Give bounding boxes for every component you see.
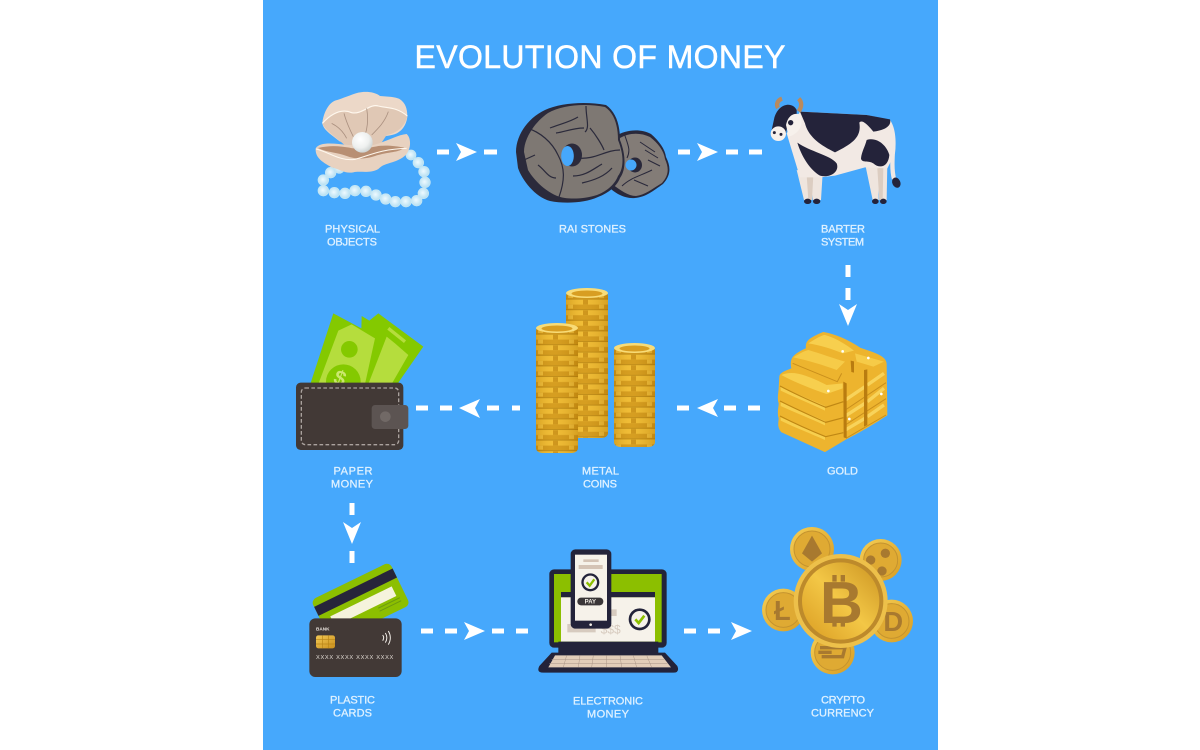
label: rai stones: RAI STONES	[559, 224, 626, 236]
dash coin	[811, 630, 855, 674]
label: metal coins	[582, 466, 619, 490]
label: metal coins: COINS	[583, 478, 617, 490]
label: plastic cards: CARDS	[333, 708, 372, 720]
legs	[797, 163, 887, 200]
arrow: barter to gold	[839, 265, 857, 326]
icon: wallet with banknotes: $	[331, 366, 350, 391]
ethereum coin	[790, 527, 834, 571]
pearl necklace	[318, 150, 430, 207]
arrow: cards to electronic money	[421, 622, 528, 640]
rear patch	[861, 139, 889, 166]
upper shell	[322, 92, 407, 142]
contactless symbol	[383, 631, 390, 645]
front stack	[536, 323, 578, 453]
label: crypto currency	[811, 694, 875, 720]
phone	[571, 549, 611, 629]
label: electronic money: MONEY	[587, 708, 630, 720]
arrow: gold to coins	[677, 399, 760, 417]
label: plastic cards: PLASTIC	[330, 694, 375, 706]
label: barter system	[821, 224, 865, 248]
screen check mark	[629, 608, 651, 630]
label: paper money: PAPER	[334, 466, 373, 478]
icon: gold bars	[778, 333, 887, 451]
sparkles	[827, 350, 883, 420]
label: crypto currency: CRYPTO	[821, 694, 865, 706]
wallet body	[296, 383, 403, 450]
label: paper money: MONEY	[331, 478, 374, 490]
label: paper money	[331, 466, 374, 490]
left stack highlights	[781, 373, 843, 394]
label: barter system: BARTER	[821, 224, 865, 236]
muzzle	[771, 126, 786, 141]
laptop base	[538, 642, 678, 673]
wallet stitching	[301, 388, 399, 445]
laptop screen frame	[549, 569, 667, 648]
icon: rai stones	[516, 103, 669, 203]
icon: pearl oyster and necklace	[316, 92, 430, 207]
pay button	[577, 598, 603, 605]
lower shell	[316, 134, 410, 173]
right stack	[614, 343, 655, 447]
label: physical objects: OBJECTS	[327, 236, 377, 248]
icon: wallet with banknotes	[296, 313, 423, 450]
small rai stone	[608, 130, 669, 198]
bitcoin coin	[794, 554, 888, 648]
label: physical objects: PHYSICAL	[325, 224, 380, 236]
green card	[311, 562, 410, 643]
label: crypto currency: CURRENCY	[811, 708, 875, 720]
label: metal coins: METAL	[582, 466, 619, 478]
phone check mark	[581, 573, 599, 591]
label: electronic money: ELECTRONIC	[573, 696, 643, 708]
arrow: paper money to plastic cards	[343, 503, 361, 563]
screen amount: $$$	[601, 622, 621, 636]
label: physical objects	[325, 224, 380, 248]
icon: coin stacks	[536, 288, 655, 453]
ripple coin	[860, 539, 902, 581]
dogecoin coin	[870, 600, 913, 642]
screen placeholder lines	[567, 609, 617, 632]
wallet clasp	[372, 405, 408, 429]
litecoin coin: Ł	[774, 595, 791, 626]
pearl	[352, 132, 373, 153]
blue poster panel	[263, 0, 938, 750]
dark front card	[309, 618, 402, 677]
card chip	[316, 635, 335, 648]
front banknote	[310, 313, 380, 385]
hooves	[804, 199, 887, 204]
card bank name: BANK	[316, 627, 330, 632]
icon: cryptocurrency coins	[762, 527, 913, 674]
back banknote	[360, 313, 423, 385]
bar gaps	[843, 361, 867, 438]
bitcoin symbol: B	[820, 569, 863, 636]
body	[787, 112, 896, 177]
horns	[777, 99, 801, 111]
label: gold: GOLD	[827, 466, 858, 478]
label: plastic cards	[330, 694, 375, 720]
pay text: PAY	[585, 600, 596, 606]
back stack	[566, 288, 608, 438]
icon: laptop and phone payment	[538, 549, 678, 673]
top bar highlights	[808, 335, 854, 353]
arrow: electronic money to crypto	[684, 622, 752, 640]
card number: XXXX XXXX XXXX XXXX	[316, 655, 394, 661]
arrow: objects to rai stones	[437, 143, 497, 161]
title: EVOLUTION OF MONEY	[414, 39, 786, 75]
dogecoin coin: D	[883, 606, 903, 637]
label: barter system: SYSTEM	[821, 236, 864, 248]
keyboard	[548, 655, 671, 667]
head	[772, 105, 797, 133]
icon: cow	[771, 99, 902, 204]
right stack lines	[845, 383, 886, 438]
icon: plastic cards	[309, 562, 410, 677]
large rai stone	[516, 103, 624, 203]
gold silhouette	[778, 333, 887, 451]
arrow: rai stones to barter	[678, 143, 762, 161]
chest patch	[797, 143, 837, 176]
back patch	[800, 112, 890, 152]
label: electronic money	[573, 696, 643, 720]
litecoin coin	[762, 589, 805, 631]
tail	[892, 143, 894, 179]
arrow: coins to paper money	[416, 399, 520, 418]
